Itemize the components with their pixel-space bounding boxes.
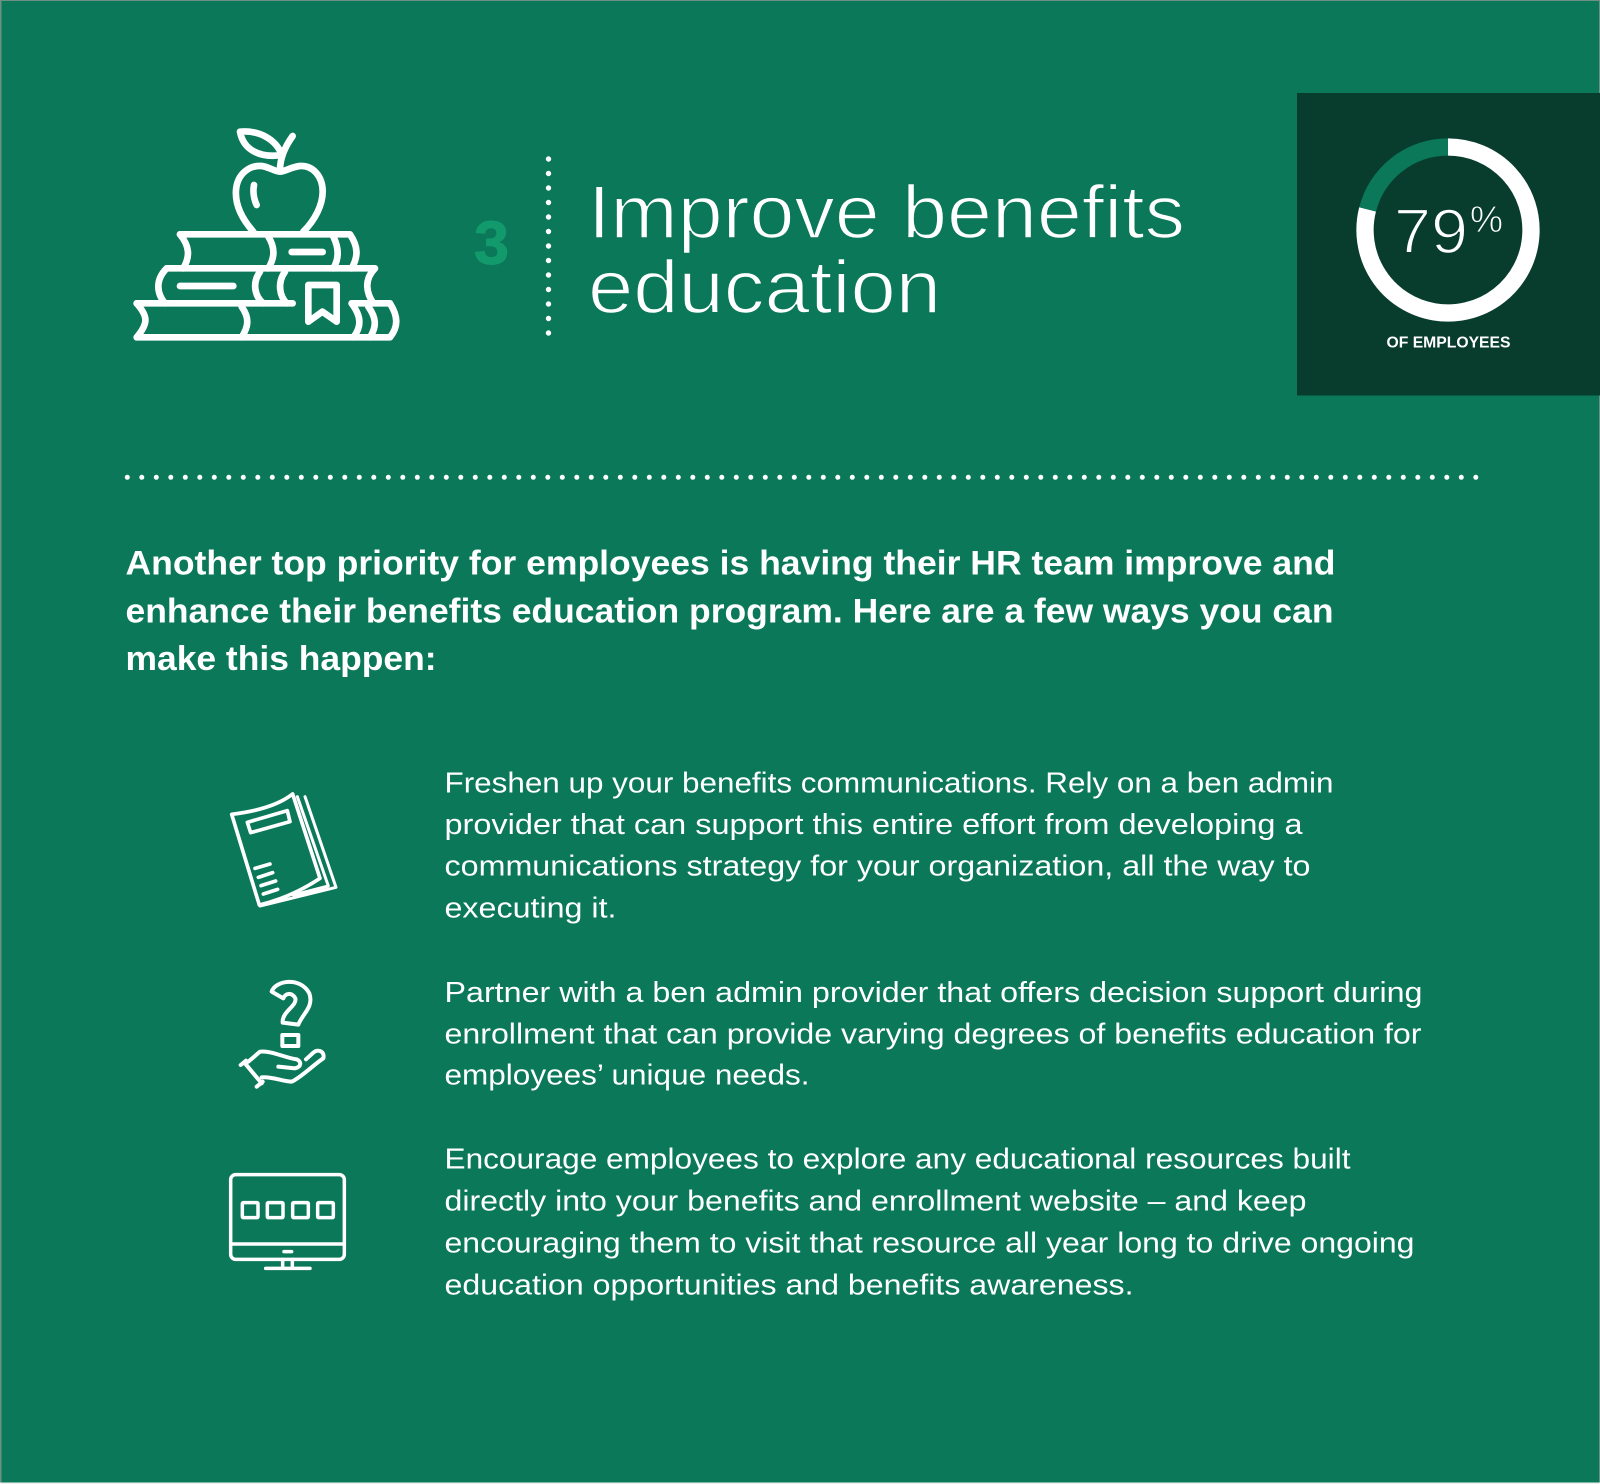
percent sign: %: [1470, 199, 1503, 240]
intro paragraph: [126, 544, 1336, 678]
text: communications tip: executing it.: [444, 892, 616, 924]
text: decision support tip: employees’ unique needs.: [444, 1060, 810, 1092]
icon: hand with question mark: [241, 982, 324, 1087]
title: education: [588, 245, 941, 329]
vertical dotted divider: [546, 159, 551, 335]
donut chart: [1365, 147, 1531, 313]
panel: 79 percent of employees: [1297, 93, 1600, 396]
text: educational resources tip: encouraging them to visit that resource all year long to drive ongoing: [444, 1228, 1414, 1260]
text: educational resources tip: [444, 1144, 1414, 1302]
stat value: 79: [1394, 197, 1468, 267]
text: decision support tip: [444, 977, 1422, 1092]
text: decision support tip: Partner with a ben admin provider that offers decision support during: [444, 977, 1422, 1009]
intro paragraph: enhance their benefits education program. Here are a few ways you can: [126, 592, 1334, 630]
icon: magazine: [232, 794, 336, 906]
icon: desktop monitor: [231, 1175, 344, 1268]
text: educational resources tip: Encourage employees to explore any educational resources built: [444, 1144, 1350, 1176]
stat label: OF EMPLOYEES: [1386, 334, 1510, 352]
title: [588, 170, 1185, 329]
horizontal dotted divider: [127, 475, 1477, 480]
text: communications tip: [444, 768, 1334, 924]
icon: apple on stacked books: [137, 131, 396, 337]
title: Improve benefits: [588, 170, 1185, 254]
text: decision support tip: enrollment that can provide varying degrees of benefits education for: [444, 1018, 1422, 1050]
intro paragraph: make this happen:: [126, 640, 436, 678]
text: educational resources tip: education opportunities and benefits awareness.: [444, 1270, 1134, 1302]
text: communications tip: communications strategy for your organization, all the way to: [444, 850, 1310, 882]
text: communications tip: provider that can support this entire effort from developing a: [444, 809, 1303, 841]
intro paragraph: Another top priority for employees is having their HR team improve and: [126, 544, 1336, 582]
text: educational resources tip: directly into your benefits and enrollment website – and keep: [444, 1186, 1306, 1218]
text: communications tip: Freshen up your benefits communications. Rely on a ben admin: [444, 768, 1334, 800]
section number: 3: [474, 209, 509, 277]
